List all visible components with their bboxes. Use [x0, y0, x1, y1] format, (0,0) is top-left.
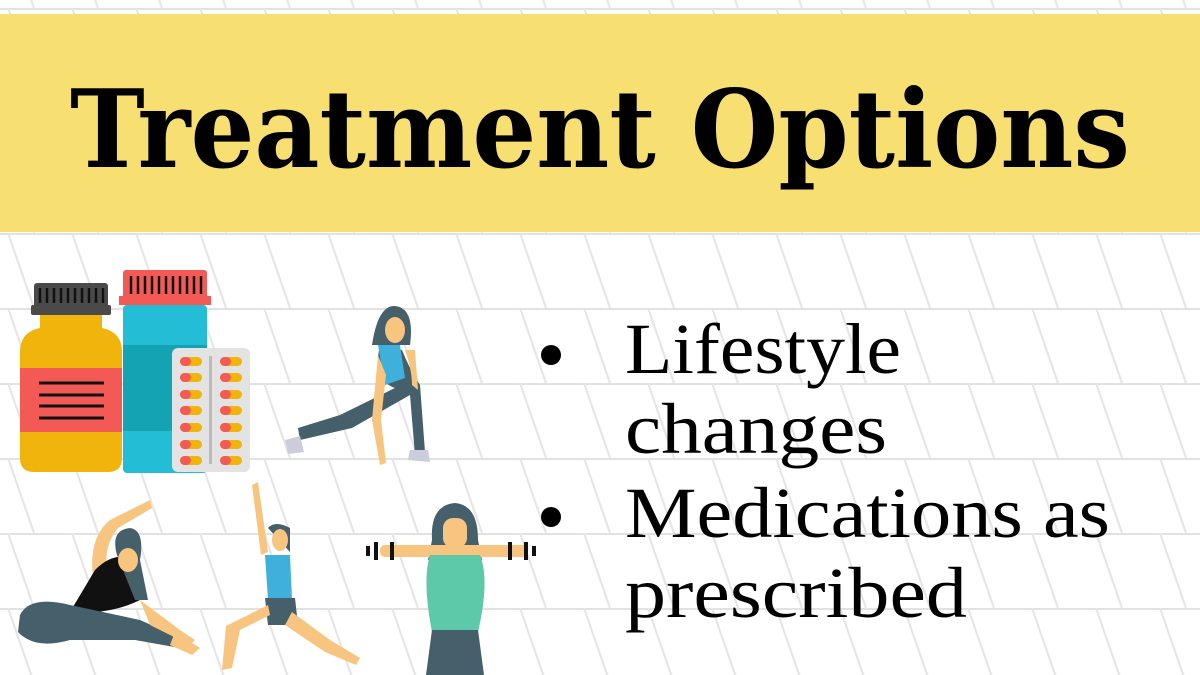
- bullet 1: Lifestyle changes: Lifestyle: [625, 309, 901, 389]
- bullet 1: Lifestyle changes: [541, 309, 901, 469]
- icon: pill blister pack: [172, 348, 250, 472]
- icon: woman side stretch: [18, 500, 200, 655]
- bullet list: [541, 309, 1110, 633]
- icon: woman with dumbbells: [366, 503, 536, 675]
- bullet 1: Lifestyle changes: changes: [625, 389, 887, 469]
- icon: woman lunge stretch: [285, 306, 430, 465]
- title: Treatment Options: [70, 67, 1130, 193]
- bullet 2: Medications as prescribed: [541, 473, 1110, 633]
- bullet 2: Medications as prescribed: Medications as: [625, 473, 1110, 553]
- icon: blue pill bottle: [119, 270, 211, 473]
- icon: woman warrior pose: [222, 482, 360, 670]
- icon: yellow pill bottle: [20, 283, 122, 472]
- bullet 2: Medications as prescribed: prescribed: [625, 553, 967, 633]
